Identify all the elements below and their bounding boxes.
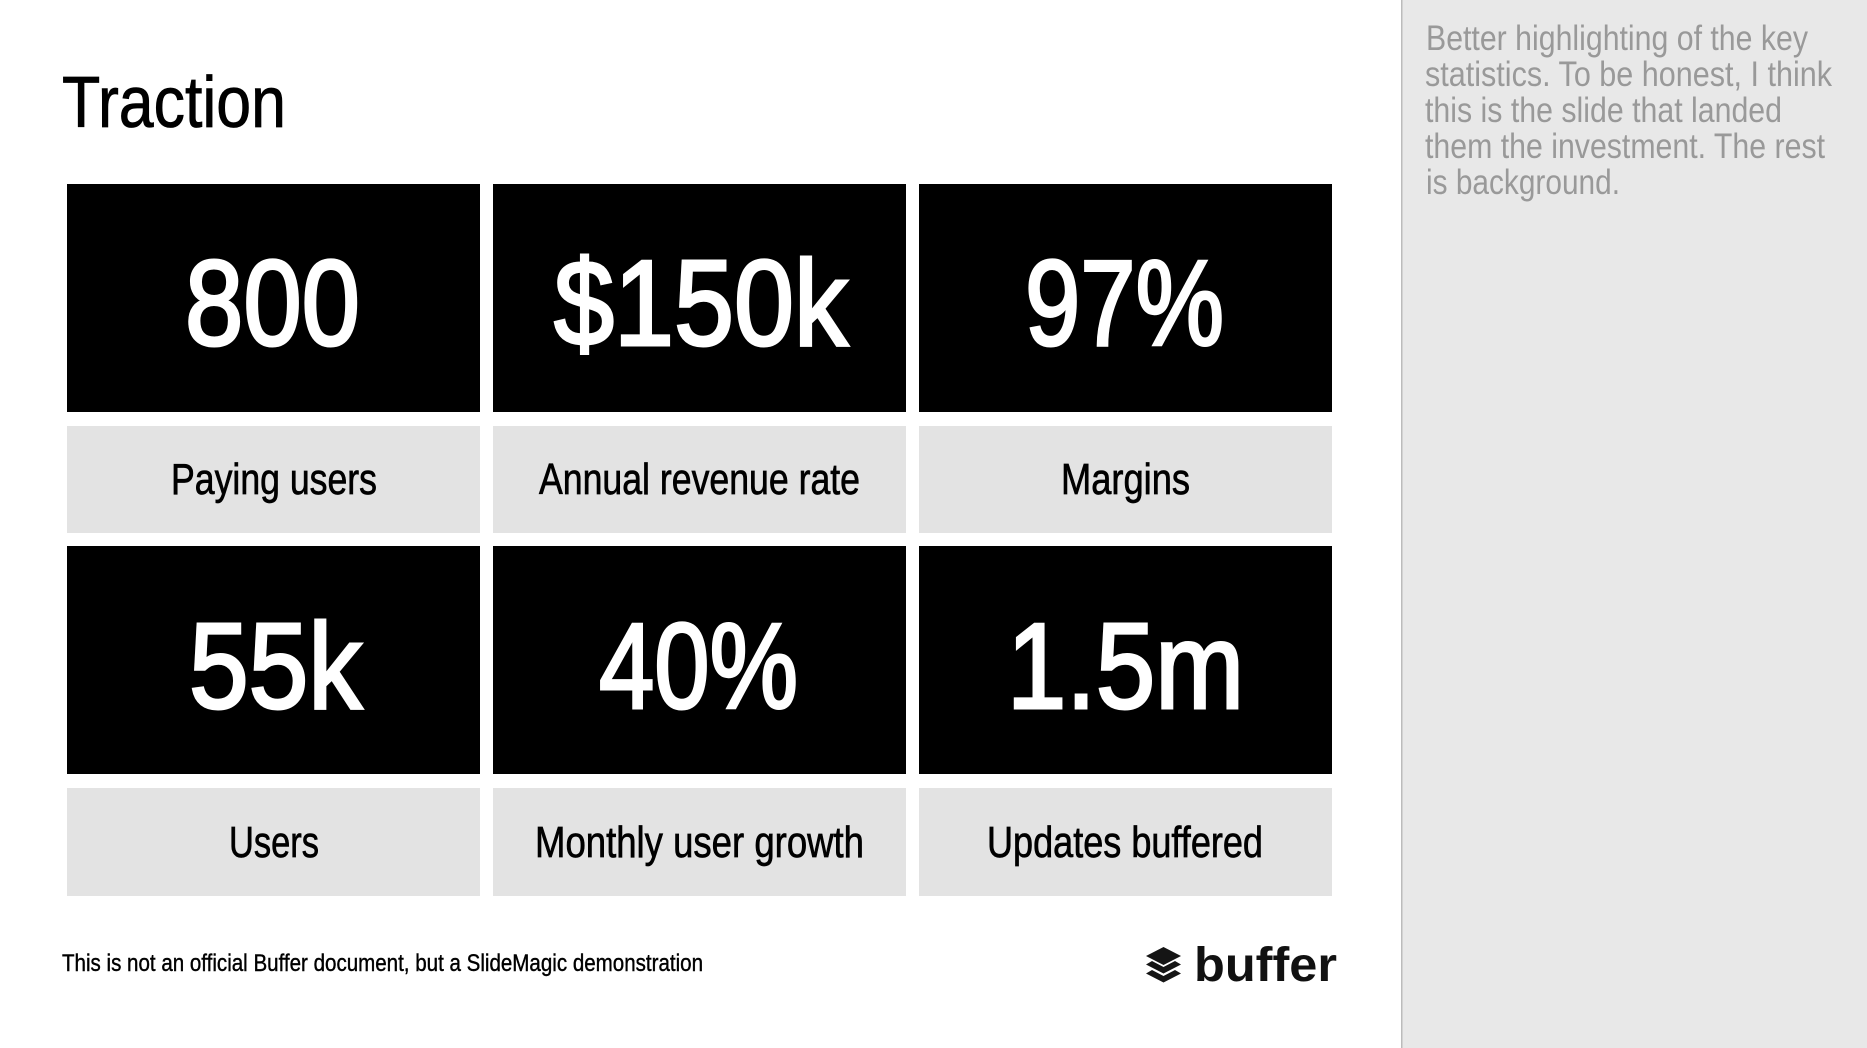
footer disclaimer: This is not an official Buffer document, but a SlideMagic demonstration — [62, 950, 703, 977]
label: annual revenue rate: Annual revenue rate — [539, 455, 860, 504]
stat panel: 800: 800 — [185, 235, 360, 371]
stat panel: $150k — [493, 184, 906, 412]
label: margins: Margins — [1061, 455, 1190, 504]
stat panel: 800 — [67, 184, 480, 412]
title: Traction — [62, 63, 286, 143]
label: annual revenue rate — [493, 426, 906, 533]
panel: commentary sidebar — [1401, 0, 1867, 1048]
stat panel: 40%: 40% — [599, 598, 798, 734]
label: paying users — [67, 426, 480, 533]
commentary text: Better highlighting of the key — [1426, 19, 1808, 58]
stat panel: 55k: 55k — [189, 598, 363, 734]
icon: stacked layers — [1146, 947, 1181, 982]
label: users: Users — [229, 818, 319, 867]
commentary text — [1425, 19, 1832, 202]
label: monthly user growth — [493, 788, 906, 896]
stat panel: 55k — [67, 546, 480, 774]
commentary text: this is the slide that landed — [1425, 91, 1782, 130]
label: paying users: Paying users — [171, 455, 377, 504]
stat panel: 97%: 97% — [1025, 235, 1224, 371]
commentary text: is background. — [1426, 163, 1620, 202]
stat panel: 97% — [919, 184, 1332, 412]
stat panel: 1.5m: 1.5m — [1007, 598, 1244, 734]
buffer logo — [1146, 939, 1337, 992]
label: monthly user growth: Monthly user growth — [535, 818, 864, 867]
label: updates buffered: Updates buffered — [987, 818, 1263, 867]
label: users — [67, 788, 480, 896]
label: updates buffered — [919, 788, 1332, 896]
stat panel: 1.5m — [919, 546, 1332, 774]
stat panel: $150k: $150k — [554, 235, 849, 371]
stat panel: 40% — [493, 546, 906, 774]
logo wordmark: buffer — [1194, 939, 1337, 992]
label: margins — [919, 426, 1332, 533]
